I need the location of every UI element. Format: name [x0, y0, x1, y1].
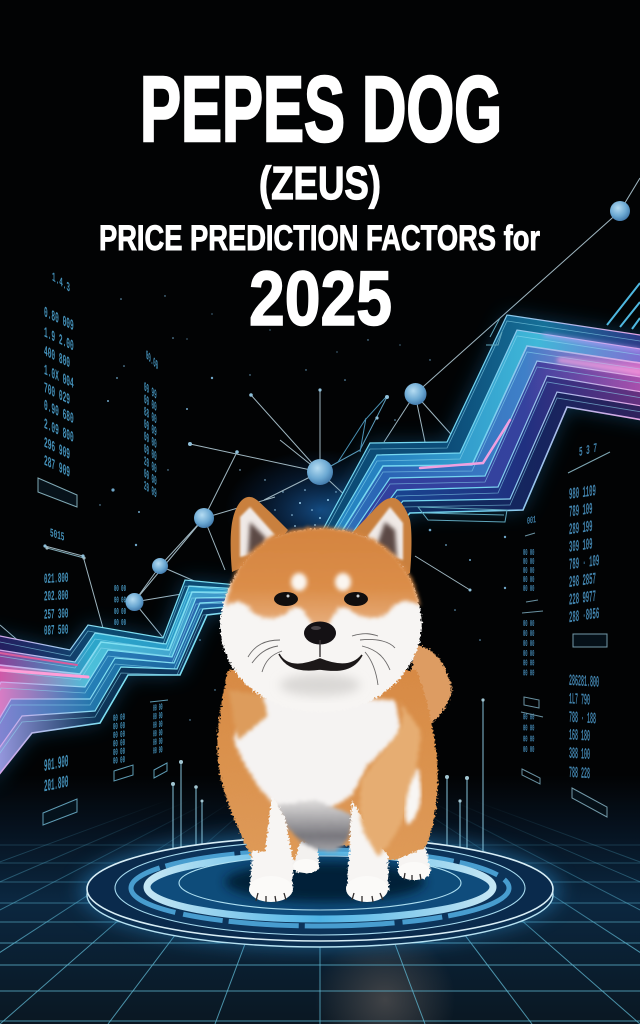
- small label and line: [45, 526, 86, 560]
- small table one: [113, 713, 125, 768]
- title: [99, 57, 540, 342]
- numeric column: 296 909: [44, 434, 70, 464]
- narrow column: 88 00: [144, 404, 157, 428]
- middle table: 00 00: [523, 584, 534, 595]
- mouth: [279, 654, 362, 670]
- left ear: [231, 497, 288, 572]
- small table one: 00 00: [113, 722, 125, 733]
- table header: [568, 443, 610, 473]
- table box: [573, 634, 607, 647]
- middle table: 00 00: [523, 575, 534, 586]
- perspective grid floor: [0, 775, 640, 1024]
- head orange top: [226, 527, 420, 628]
- bottom-left numbers: 901.900: [44, 751, 68, 776]
- belly shade: [276, 800, 353, 852]
- front paws: [249, 859, 430, 902]
- strip 3: [0, 346, 640, 733]
- narrow column header: 00.00: [146, 349, 158, 375]
- forehead line: [320, 537, 324, 595]
- middle table: 00 00: [523, 620, 534, 630]
- rear right leg: [398, 800, 431, 880]
- narrow column: 20 09: [144, 478, 157, 502]
- network nodes: [126, 201, 630, 611]
- data columns left: [38, 270, 168, 825]
- right orange flank: [360, 702, 421, 857]
- lower table: [569, 672, 599, 784]
- small table two: 00 00: [153, 728, 163, 741]
- narrow column: [144, 379, 157, 502]
- middle table: 00 00: [523, 746, 534, 756]
- rising price ribbon chart: [0, 283, 640, 786]
- strip 4: [0, 361, 640, 751]
- upper table: 288 ·8056: [569, 605, 599, 628]
- pink highlights: [0, 335, 640, 677]
- narrow column: 20 00: [144, 454, 157, 477]
- narrow column: 00 00: [144, 466, 157, 489]
- small table two: 00 00: [153, 737, 163, 749]
- middle table: [523, 548, 534, 756]
- lower table: 1L7 790: [569, 690, 590, 710]
- title line: 2025: 2025: [249, 256, 392, 342]
- narrow column: 00 99: [144, 379, 157, 403]
- numeric column: 0.90 680: [44, 396, 74, 429]
- middle table: 00 00: [523, 548, 534, 559]
- strip 6: [0, 392, 640, 786]
- rear left leg: [292, 840, 319, 873]
- right flank white: [406, 768, 421, 825]
- upper table: 228 9977: [569, 587, 596, 610]
- disc rim: [87, 843, 553, 947]
- middle table: 00 00: [523, 557, 534, 568]
- title line: (ZEUS): (ZEUS): [259, 157, 381, 209]
- light rods: [171, 698, 485, 880]
- lower table: 168 180: [569, 726, 590, 746]
- inner ring: [179, 856, 461, 910]
- eyebrows: [291, 573, 351, 591]
- upper table: 309 109: [569, 535, 593, 557]
- left front leg: [250, 795, 293, 892]
- bottom-left numbers: 201.800: [44, 772, 68, 797]
- middle table: 00 00: [523, 649, 534, 660]
- body base: [217, 670, 438, 860]
- bottom-left box: [43, 799, 77, 825]
- bracket at peak: [486, 318, 502, 345]
- middle table: 00 00: [523, 639, 534, 650]
- strip 5: [0, 376, 640, 768]
- middle table lines and boxes: [521, 533, 543, 784]
- small table one: 00 00: [113, 747, 125, 759]
- numeric column: 2.09 800: [44, 415, 74, 447]
- small table one: 00 00: [113, 713, 125, 725]
- bottom box: [572, 788, 607, 817]
- narrow column: 00 00: [144, 429, 157, 452]
- numeric column: 400 800: [44, 342, 70, 373]
- lower table: 286281.800: [569, 672, 599, 692]
- numeric column: 1.0X 004: [44, 361, 74, 393]
- middle table: 00 00: [523, 724, 534, 734]
- nose: [304, 622, 336, 657]
- narrow column: 00 00: [144, 441, 157, 465]
- small table one: 00 00: [113, 756, 125, 768]
- middle table: 00 00: [523, 713, 534, 724]
- ring two: [115, 841, 525, 935]
- upper table: [569, 481, 599, 628]
- lower-left numbers: 087 500: [44, 623, 68, 640]
- upper table: 980 1109: [569, 482, 596, 504]
- small table two: [153, 703, 163, 758]
- upper right ribbon fragment: [607, 283, 640, 329]
- numeric column: 0.80 009: [44, 303, 74, 336]
- lower table: 788 · 188: [569, 708, 596, 729]
- small table boxes: [114, 700, 168, 781]
- upper table: 789 · 109: [569, 552, 599, 575]
- small table two: 00 00: [153, 720, 163, 732]
- column header: 1.4.3: [52, 270, 70, 297]
- disc top: [87, 837, 553, 941]
- highlighted box: [38, 478, 77, 507]
- lower-left numbers: 257 300: [44, 607, 68, 624]
- middle table: 00 00: [523, 659, 534, 670]
- small table two: 00 00: [153, 746, 163, 758]
- middle table: 00 00: [523, 735, 534, 745]
- numeric column: [44, 303, 74, 484]
- right ear: [353, 498, 412, 577]
- whiskers: [248, 634, 395, 685]
- network dots: [43, 388, 472, 592]
- numeric column: 287 909: [44, 452, 70, 482]
- platform glow: [80, 832, 560, 948]
- lower-left numbers: 021.800: [44, 571, 68, 588]
- numeric column: 700 029: [44, 379, 70, 409]
- column near ribbon: 00 00: [114, 607, 126, 618]
- tail: [410, 645, 452, 730]
- middle header: 001: [527, 515, 536, 528]
- segmented ring: [131, 850, 509, 926]
- bracket under ribbon: [418, 507, 507, 522]
- chest white: [233, 695, 402, 818]
- table header: 5 3 7: [579, 443, 597, 461]
- data columns right: [521, 443, 610, 817]
- head white base: [220, 529, 422, 712]
- middle table: 00 00: [523, 669, 534, 680]
- star particles: [99, 295, 506, 721]
- shiba inu dog: [217, 497, 452, 902]
- eyes: [274, 592, 368, 606]
- muzzle and chin shade: [280, 674, 360, 696]
- lower table: 788 228: [569, 764, 590, 784]
- bottom-left numbers: [44, 751, 68, 797]
- ribbon glow: [0, 315, 640, 786]
- left shoulder orange: [228, 690, 268, 740]
- lower table: 388 100: [569, 744, 590, 764]
- narrow column: 00 09: [144, 417, 157, 440]
- small table two: 00 00: [153, 703, 163, 715]
- middle table: 00 00: [523, 629, 534, 640]
- lower-left numbers: 202.800: [44, 589, 68, 606]
- middle table: 00 00: [523, 566, 534, 577]
- upper table: 298 2857: [569, 570, 596, 592]
- small label and line: 5015: [50, 526, 65, 545]
- strip 2: [0, 330, 640, 715]
- narrow column: 00 00: [144, 392, 157, 415]
- upper table: 789 109: [569, 500, 593, 522]
- ribbon secondary lines: [0, 321, 640, 774]
- small table two: 00 00: [153, 711, 163, 724]
- small table one: 00 00: [113, 730, 125, 742]
- platform: [80, 698, 560, 948]
- ribbon bright lines: [0, 315, 640, 786]
- strip 1: [0, 315, 640, 698]
- column near ribbon: [114, 584, 126, 629]
- right front leg: [347, 800, 389, 890]
- network lines: [0, 178, 640, 668]
- small table one: 00 00: [113, 739, 125, 751]
- column near ribbon: 00 00: [114, 596, 126, 606]
- bright ring: [147, 855, 493, 919]
- lower-left numbers: [44, 571, 68, 640]
- column near ribbon: 00 00: [114, 619, 126, 629]
- dog shadow: [225, 862, 425, 902]
- upper table: 289 199: [569, 518, 593, 540]
- column near ribbon: 00 00: [114, 584, 126, 595]
- spark glow behind dog: [225, 450, 415, 570]
- numeric column: 1.9 2.00: [44, 323, 74, 356]
- spark particles: [239, 469, 376, 527]
